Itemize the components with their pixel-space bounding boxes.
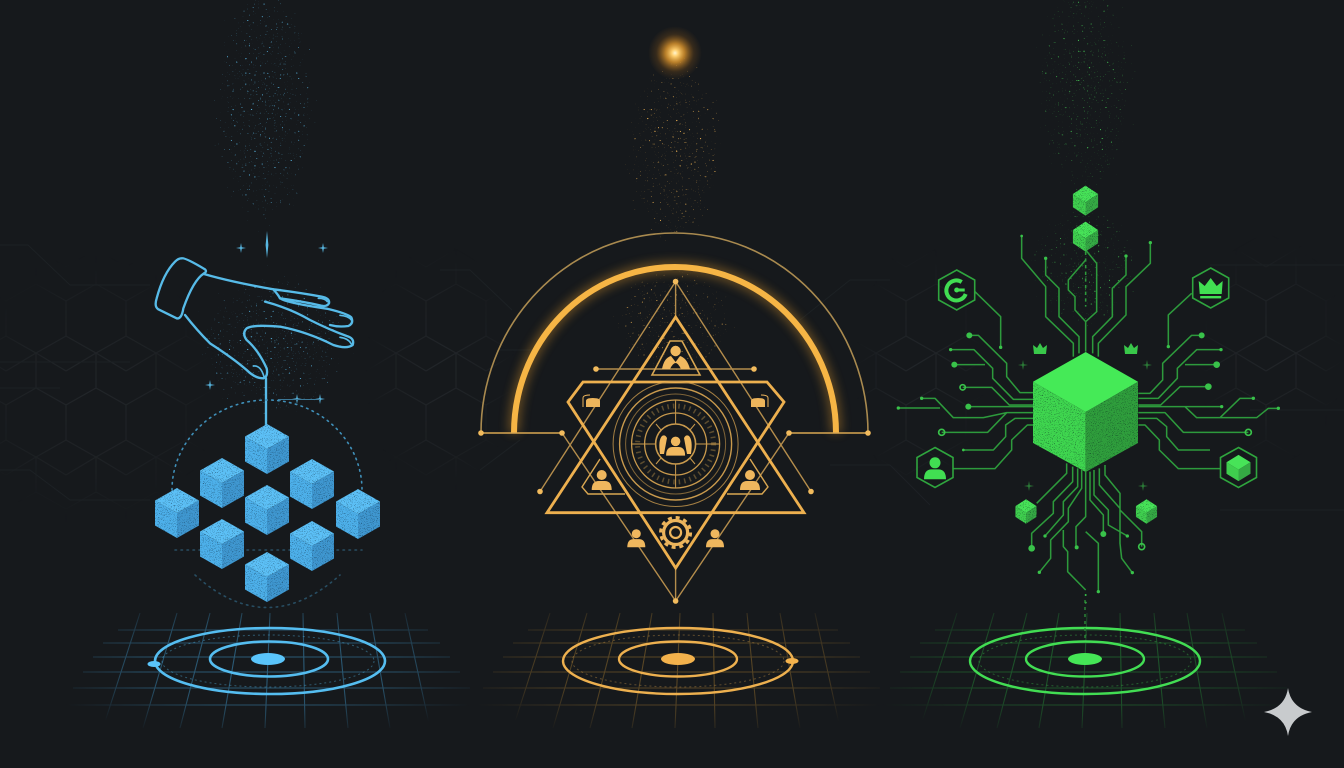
dotted orbit around cubes — [172, 400, 362, 608]
green falling particles — [1015, 0, 1155, 245]
orange perspective grid — [473, 613, 890, 728]
icon: small crowns — [1033, 343, 1138, 354]
central green cube — [1033, 352, 1138, 472]
star node dots — [478, 279, 871, 604]
stacked top cubes — [1073, 186, 1098, 252]
background hexagon network — [12, 287, 1316, 472]
outer thin arch — [481, 233, 868, 433]
column: orange star emblem — [473, 15, 890, 728]
blue falling particles — [193, 0, 337, 280]
orange particles inside arch — [590, 240, 760, 400]
concentric central dial — [613, 382, 738, 506]
icon: green sparkles — [1018, 360, 1152, 491]
icon: hexagon cube badge — [1220, 448, 1256, 488]
icon: hexagon swirl badge — [939, 270, 975, 310]
star geometry lines — [481, 282, 868, 601]
orange falling particles — [607, 15, 743, 285]
icon: hexagon person badge — [917, 448, 953, 488]
icon: four people — [592, 470, 760, 547]
green particles near top traces — [1007, 175, 1163, 355]
blue cube cluster — [155, 424, 380, 602]
column: blue hand and cubes — [63, 0, 480, 728]
green perspective grid — [880, 613, 1297, 728]
icon: top person — [662, 346, 690, 369]
icon: hexagon crown badge — [1193, 268, 1229, 308]
blue perspective grid — [63, 613, 480, 728]
icon: blue sparkles — [205, 231, 328, 404]
small side cubes — [1015, 499, 1157, 524]
circuit traces — [898, 236, 1278, 592]
blue target rings — [148, 628, 385, 694]
column: green circuit cube — [880, 0, 1297, 728]
icon: left and right hooded badges — [583, 395, 768, 407]
icon: reaching hand — [156, 258, 353, 425]
orange glowing point — [648, 26, 702, 80]
icon: gear — [661, 518, 691, 548]
icon: four-point star watermark — [1264, 688, 1312, 736]
green target rings — [970, 600, 1200, 694]
blue particles around hand — [167, 240, 377, 450]
glowing thick arch — [514, 267, 836, 433]
orange target rings — [563, 628, 798, 694]
icon: central group of people — [659, 435, 692, 456]
circuit node dots — [897, 235, 1280, 604]
